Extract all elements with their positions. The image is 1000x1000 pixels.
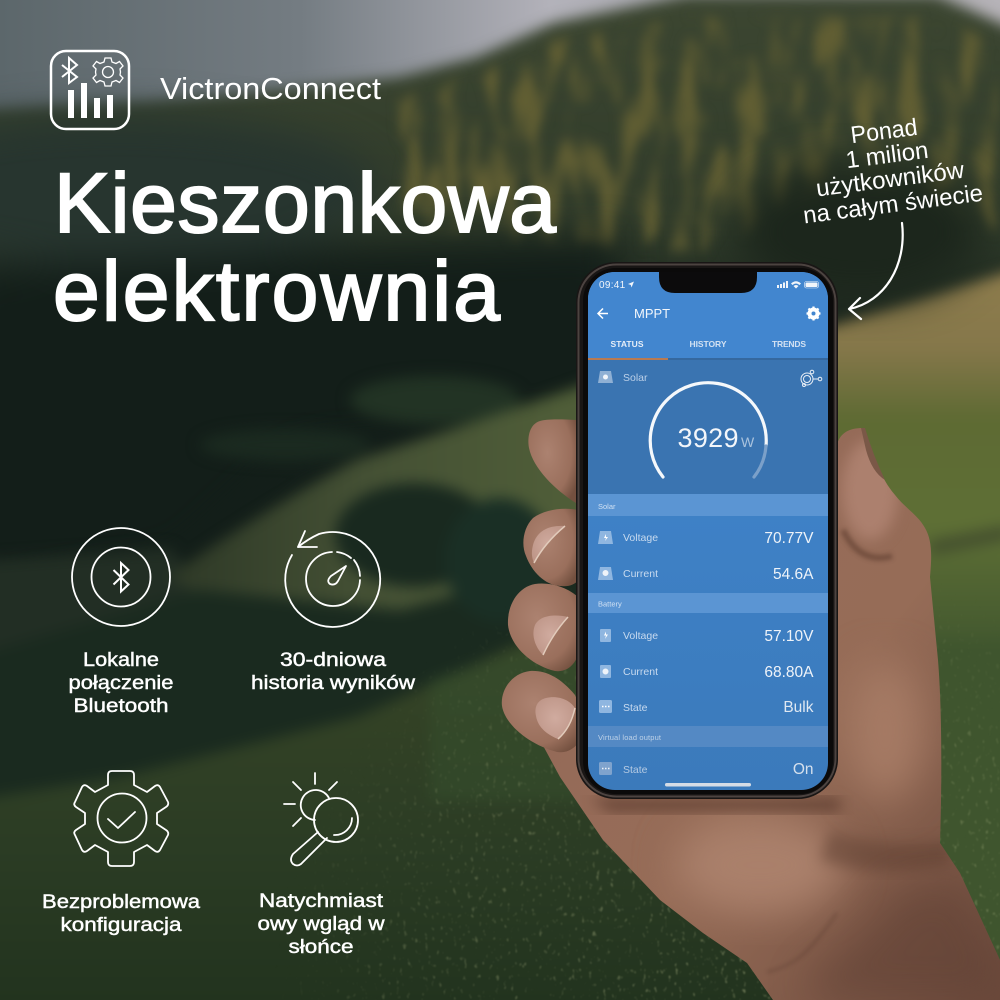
- label: konfiguracja: [60, 914, 182, 936]
- finger nails: [532, 526, 575, 739]
- app header: HISTORY: [690, 339, 727, 349]
- solar readings: [588, 494, 828, 583]
- settings gear: [806, 306, 820, 320]
- notch: [659, 272, 757, 293]
- callout: users worldwide: 1 milion: [844, 137, 930, 174]
- arrow to phone: [849, 223, 903, 319]
- label: połączenie: [68, 672, 174, 694]
- dark bush on right slope: [738, 164, 982, 300]
- status bar: 09:41: [599, 280, 626, 291]
- battery readings: 68.80A: [764, 664, 814, 681]
- title: [53, 156, 556, 338]
- callout: users worldwide: użytkowników: [814, 157, 966, 202]
- solar readings: 70.77V: [764, 530, 814, 547]
- battery readings: [588, 593, 828, 716]
- app screen: [588, 272, 828, 790]
- virtual load output: Virtual load output: [598, 733, 662, 742]
- label: owy wgląd w: [258, 913, 386, 935]
- label: Natychmiast: [259, 890, 384, 912]
- feature: sunlight readability: [258, 773, 386, 958]
- battery readings: 57.10V: [764, 628, 814, 645]
- label: [68, 649, 174, 717]
- icon: sun and magnifier: [284, 773, 358, 866]
- hand holding phone: [502, 419, 1000, 1000]
- callout: users worldwide: na całym świecie: [802, 180, 985, 229]
- thumb nail edge: [861, 428, 885, 480]
- callout: users worldwide: Ponad: [849, 114, 919, 149]
- label: [42, 891, 200, 936]
- label: słońce: [288, 936, 354, 958]
- app header: MPPT: [634, 306, 670, 321]
- battery readings: Voltage: [623, 630, 658, 642]
- label: Bluetooth: [74, 695, 168, 717]
- solar readings: Solar: [598, 502, 616, 511]
- solar gauge panel: W: [741, 434, 755, 450]
- battery readings: State: [623, 702, 648, 714]
- app header: [588, 272, 828, 360]
- label: Bezproblemowa: [42, 891, 200, 913]
- battery readings: Current: [623, 666, 658, 678]
- solar readings: Voltage: [623, 532, 658, 544]
- solar gauge panel: Solar: [623, 372, 648, 384]
- app logo icon: [51, 51, 129, 129]
- feature: 30-day history: [251, 531, 416, 694]
- virtual load output: [588, 726, 828, 786]
- title: elektrownia: [53, 244, 500, 338]
- virtual load output: On: [793, 761, 814, 778]
- callout: users worldwide: [802, 114, 985, 229]
- solar readings: 54.6A: [773, 566, 814, 583]
- icon: gear with check: [74, 771, 168, 866]
- battery readings: Bulk: [783, 699, 814, 716]
- title: Kieszonkowa: [54, 156, 556, 250]
- battery readings: Battery: [598, 600, 622, 608]
- label: [251, 649, 416, 694]
- brand name: VictronConnect: [160, 71, 381, 106]
- label: 30-dniowa: [280, 649, 386, 671]
- label: historia wyników: [251, 672, 416, 694]
- label: Lokalne: [83, 649, 159, 671]
- solar readings: Current: [623, 568, 658, 580]
- virtual load output: State: [623, 764, 648, 776]
- icon: gauge with rewind arrow: [285, 531, 380, 627]
- status bar: [599, 281, 819, 288]
- fingers: [502, 419, 583, 752]
- phone: [576, 262, 838, 799]
- label: [258, 890, 386, 958]
- back arrow: [598, 308, 608, 318]
- app header: TRENDS: [772, 339, 806, 349]
- phone body: [576, 262, 838, 799]
- palm and wrist: [540, 428, 1000, 1000]
- solar gauge panel: 3929: [678, 423, 738, 453]
- feature: bluetooth: [68, 528, 174, 717]
- solar gauge panel: [588, 360, 828, 494]
- feature: easy configuration: [42, 771, 200, 936]
- icon: bluetooth rings: [72, 528, 170, 626]
- app header: STATUS: [610, 339, 644, 349]
